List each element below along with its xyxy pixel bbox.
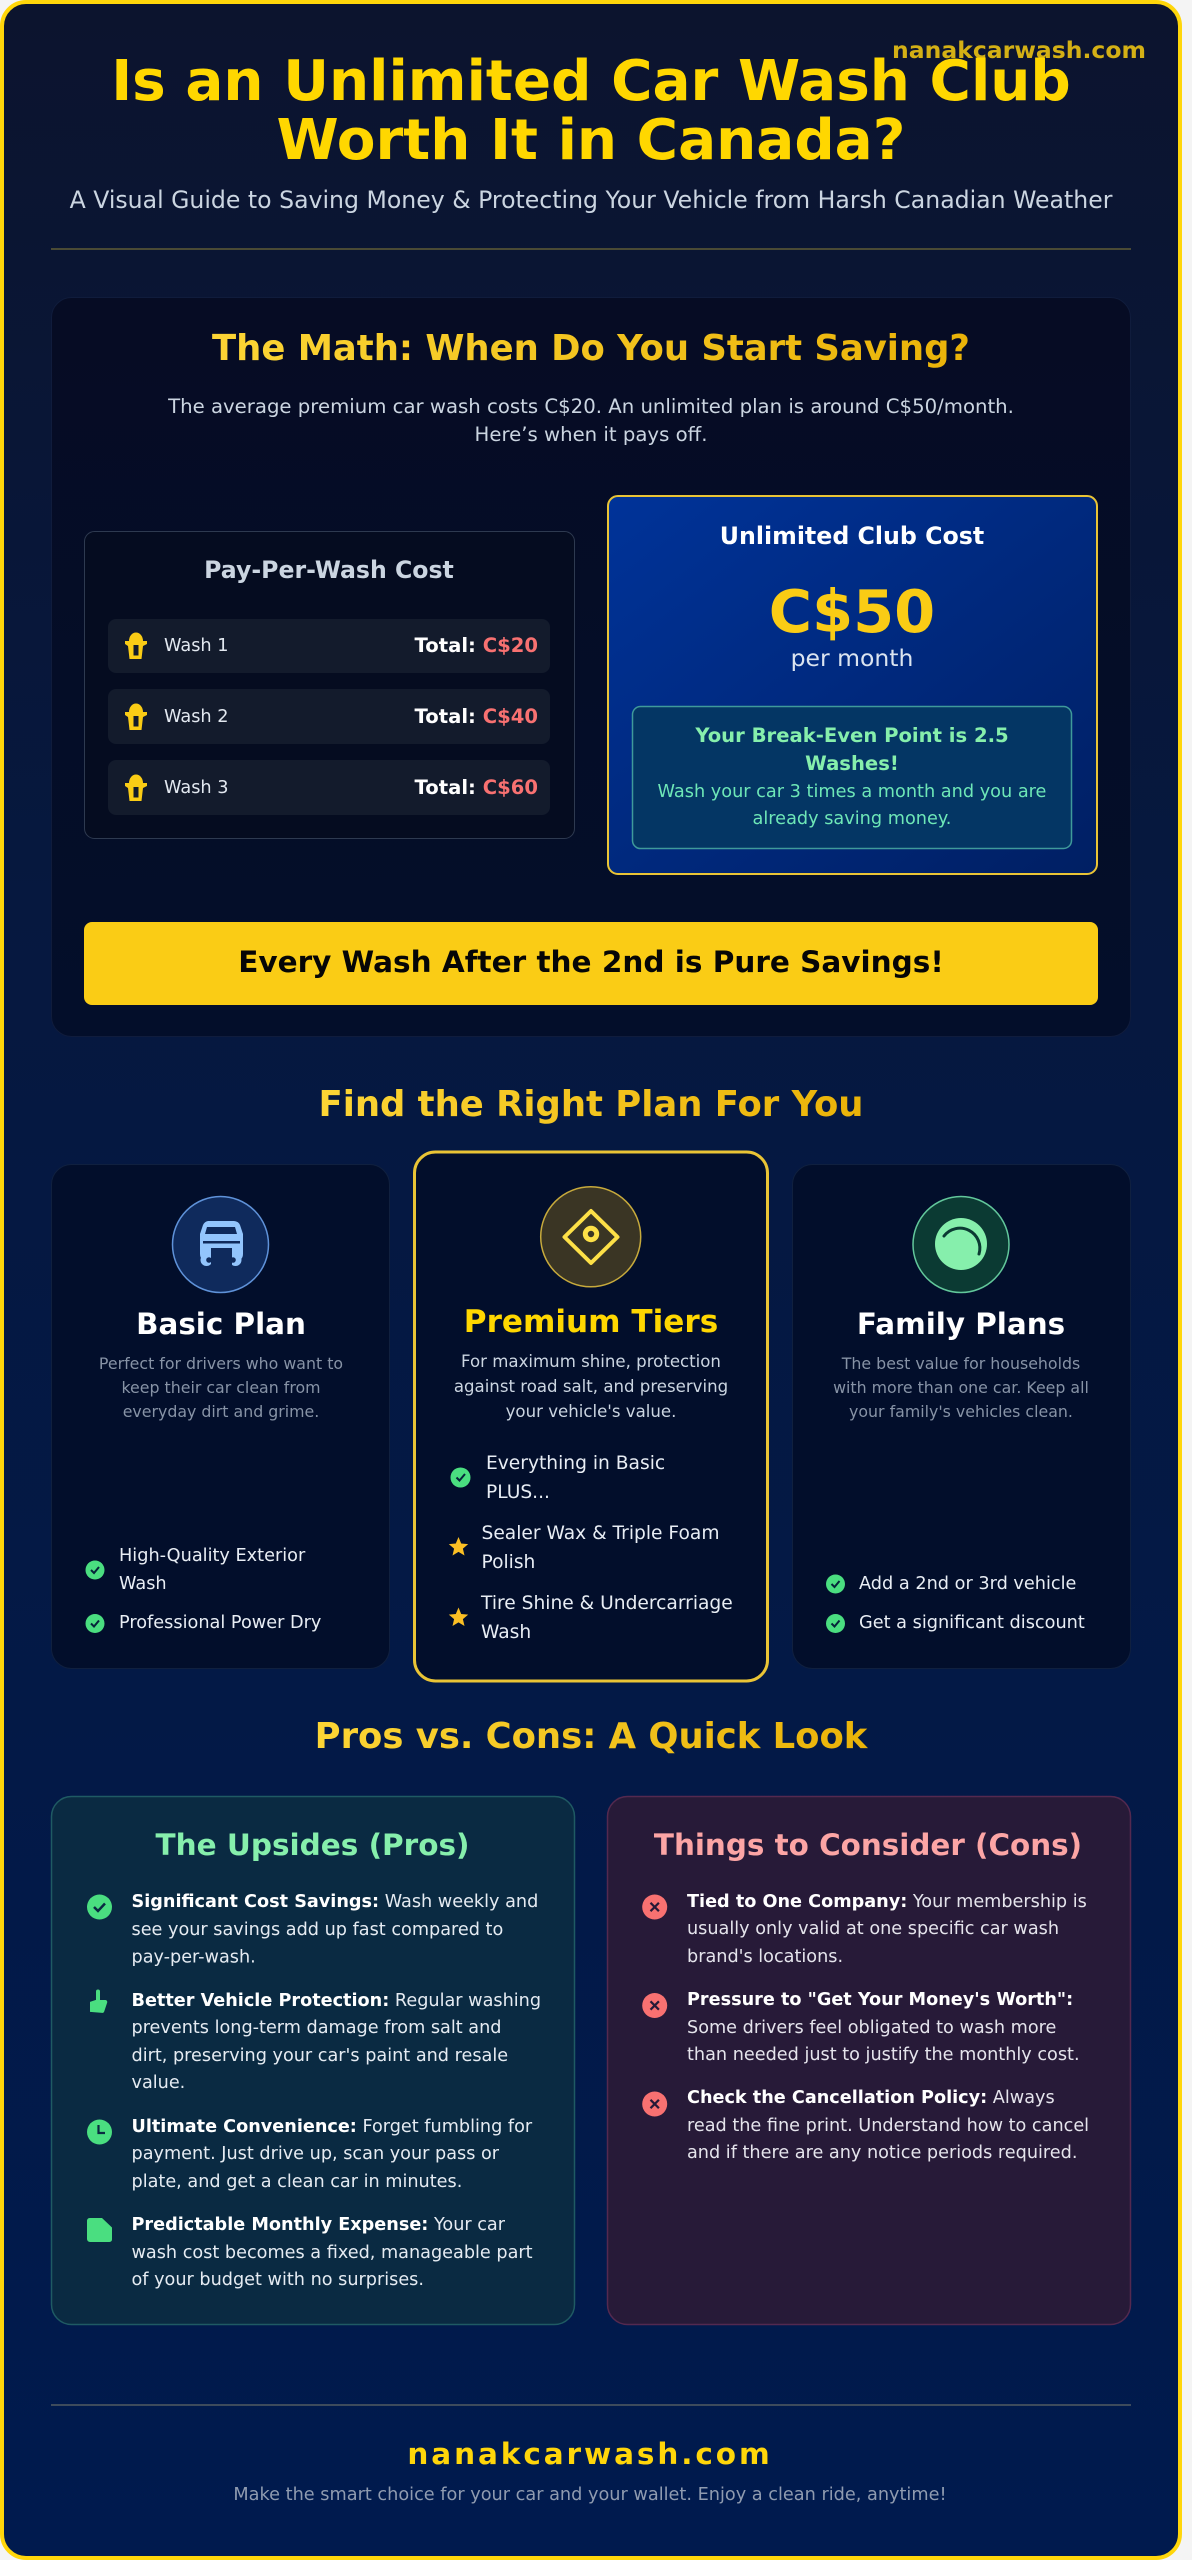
- row: wash 1: Wash 1: [164, 636, 228, 656]
- pro: vehicle protection: Better Vehicle Protection: Regular washing: [132, 1991, 541, 2011]
- basic plan features: [86, 1546, 321, 1633]
- panel: unlimited club cost: [608, 496, 1097, 874]
- con: tied to one company: [642, 1892, 1087, 1967]
- pro: convenience: payment. Just drive up, scan your pass or: [132, 2144, 500, 2164]
- con: tied to one company: brand's locations.: [687, 1947, 843, 1967]
- panel: pros: [52, 1796, 574, 2324]
- icon: wash: [125, 632, 147, 659]
- footer tagline: Make the smart choice for your car and your wallet. Enjoy a clean ride, anytime!: [233, 2485, 947, 2505]
- panel: cons: [608, 1796, 1130, 2324]
- callout: pure savings: [84, 922, 1098, 1005]
- pro: predictable expense: wash cost becomes a fixed, manageable part: [132, 2243, 533, 2263]
- icon: car: [172, 1196, 268, 1292]
- pro: convenience: Ultimate Convenience: Forget fumbling for: [132, 2117, 533, 2137]
- con: pressure: Pressure to "Get Your Money's Worth":: [687, 1990, 1073, 2010]
- basic plan description: [99, 1354, 343, 1421]
- row: wash 3: Total: C$60: [415, 776, 538, 799]
- premium title: Premium Tiers: [464, 1304, 718, 1340]
- premium features: [449, 1453, 733, 1643]
- premium description: against road salt, and preserving: [454, 1377, 728, 1396]
- pro: vehicle protection: [90, 1990, 541, 2093]
- pro: vehicle protection: value.: [132, 2073, 185, 2093]
- row: wash 3: [108, 760, 550, 815]
- family plan description: with more than one car. Keep all: [833, 1378, 1089, 1397]
- con: cancellation policy: and if there are any notice periods required.: [687, 2143, 1077, 2163]
- footer brand: nanakcarwash.com: [407, 2437, 773, 2471]
- premium features: Wash: [481, 1622, 531, 1643]
- pro: cost savings: pay-per-wash.: [132, 1948, 256, 1968]
- row: wash 1: [108, 619, 550, 673]
- basic plan description: everyday dirt and grime.: [123, 1402, 319, 1421]
- callout: pure savings: Every Wash After the 2nd is Pure Savings!: [238, 945, 944, 979]
- panel: family plans: [792, 1164, 1130, 1668]
- panel: pay-per-wash cost: [84, 532, 574, 838]
- heading: plans: Find the Right Plan For You: [319, 1084, 863, 1125]
- con: pressure: Some drivers feel obligated to wash more: [687, 2018, 1056, 2038]
- cons heading: Things to Consider (Cons): [654, 1828, 1082, 1862]
- panel: the math: [52, 298, 1130, 1036]
- panel: basic plan: [52, 1164, 390, 1668]
- row: wash 1: Total: C$20: [415, 634, 538, 657]
- family plan description: your family's vehicles clean.: [849, 1402, 1073, 1421]
- callout: break-even: [632, 706, 1072, 848]
- family plan features: Get a significant discount: [859, 1613, 1085, 1633]
- callout: break-even: Wash your car 3 times a month and you are: [658, 782, 1046, 802]
- pro: vehicle protection: prevents long-term damage from salt and: [132, 2018, 501, 2038]
- title: [111, 49, 1071, 173]
- title: Is an Unlimited Car Wash Club: [111, 49, 1071, 114]
- pro: convenience: [87, 2117, 533, 2192]
- heading: pros vs cons: Pros vs. Cons: A Quick Look: [315, 1716, 869, 1757]
- subtitle: A Visual Guide to Saving Money & Protecting Your Vehicle from Harsh Canadian Weather: [70, 186, 1113, 214]
- premium features: Tire Shine & Undercarriage: [480, 1593, 733, 1614]
- pro: cost savings: see your savings add up fast compared to: [132, 1920, 503, 1940]
- pro: cost savings: Significant Cost Savings: Wash weekly and: [132, 1892, 538, 1912]
- title: Worth It in Canada?: [277, 108, 905, 173]
- con: tied to one company: Tied to One Company: Your membership is: [687, 1892, 1087, 1912]
- basic plan features: Professional Power Dry: [119, 1613, 321, 1633]
- premium features: PLUS...: [486, 1482, 550, 1503]
- pro: convenience: plate, and get a clean car in minutes.: [132, 2172, 462, 2192]
- icon: family circle: [913, 1196, 1009, 1292]
- premium description: [454, 1352, 728, 1421]
- con: pressure: than needed just to justify the monthly cost.: [687, 2045, 1080, 2065]
- family plan features: Add a 2nd or 3rd vehicle: [859, 1574, 1076, 1594]
- premium description: For maximum shine, protection: [461, 1352, 721, 1371]
- con: cancellation policy: Check the Cancellation Policy: Always: [687, 2088, 1055, 2108]
- basic plan description: keep their car clean from: [121, 1378, 321, 1397]
- family plan description: The best value for households: [841, 1354, 1080, 1373]
- per month: per month: [791, 644, 913, 672]
- math heading: The Math: When Do You Start Saving?: [212, 328, 970, 369]
- con: cancellation policy: read the fine print. Understand how to cancel: [687, 2116, 1089, 2136]
- math intro text: Here’s when it pays off.: [475, 423, 707, 446]
- callout: break-even: Washes!: [805, 752, 899, 775]
- basic plan features: High-Quality Exterior: [119, 1546, 306, 1566]
- premium features: Polish: [482, 1552, 535, 1573]
- icon: wash: [125, 774, 147, 801]
- pro: predictable expense: of your budget with no surprises.: [132, 2270, 424, 2290]
- con: pressure: [642, 1990, 1080, 2065]
- premium features: Everything in Basic: [486, 1453, 665, 1474]
- math intro text: [167, 395, 1014, 446]
- panel: premium tiers: [414, 1152, 768, 1681]
- unlimited heading: Unlimited Club Cost: [720, 522, 984, 550]
- premium features: Sealer Wax & Triple Foam: [482, 1523, 719, 1544]
- family plan features: [826, 1574, 1085, 1633]
- family plan title: Family Plans: [857, 1307, 1065, 1341]
- pro: vehicle protection: dirt, preserving your car's paint and resale: [132, 2046, 508, 2066]
- callout: break-even: already saving money.: [753, 809, 951, 829]
- callout: break-even: Your Break-Even Point is 2.5: [694, 724, 1009, 747]
- basic plan description: Perfect for drivers who want to: [99, 1354, 343, 1373]
- icon: diamond: [541, 1187, 641, 1287]
- pros heading: The Upsides (Pros): [155, 1828, 470, 1862]
- row: wash 2: Wash 2: [164, 707, 228, 727]
- family plan description: [833, 1354, 1089, 1421]
- basic plan features: Wash: [119, 1574, 167, 1594]
- basic plan title: Basic Plan: [136, 1307, 306, 1341]
- con: cancellation policy: [642, 2088, 1089, 2163]
- icon: wash: [125, 704, 147, 730]
- con: tied to one company: usually only valid at one specific car wash: [687, 1919, 1059, 1939]
- pay-per-wash heading: Pay-Per-Wash Cost: [204, 556, 454, 584]
- watermark: nanakcarwash.com: [892, 36, 1146, 64]
- pro: predictable expense: Predictable Monthly Expense: Your car: [132, 2215, 506, 2235]
- row: wash 2: Total: C$40: [415, 705, 538, 728]
- pro: cost savings: [87, 1892, 538, 1968]
- premium description: your vehicle's value.: [506, 1402, 676, 1421]
- pro: predictable expense: [87, 2215, 533, 2290]
- math intro text: The average premium car wash costs C$20. An unlimited plan is around C$50/month.: [167, 395, 1014, 418]
- row: wash 2: [108, 689, 550, 744]
- row: wash 3: Wash 3: [164, 778, 228, 798]
- price: C$50: [769, 577, 935, 646]
